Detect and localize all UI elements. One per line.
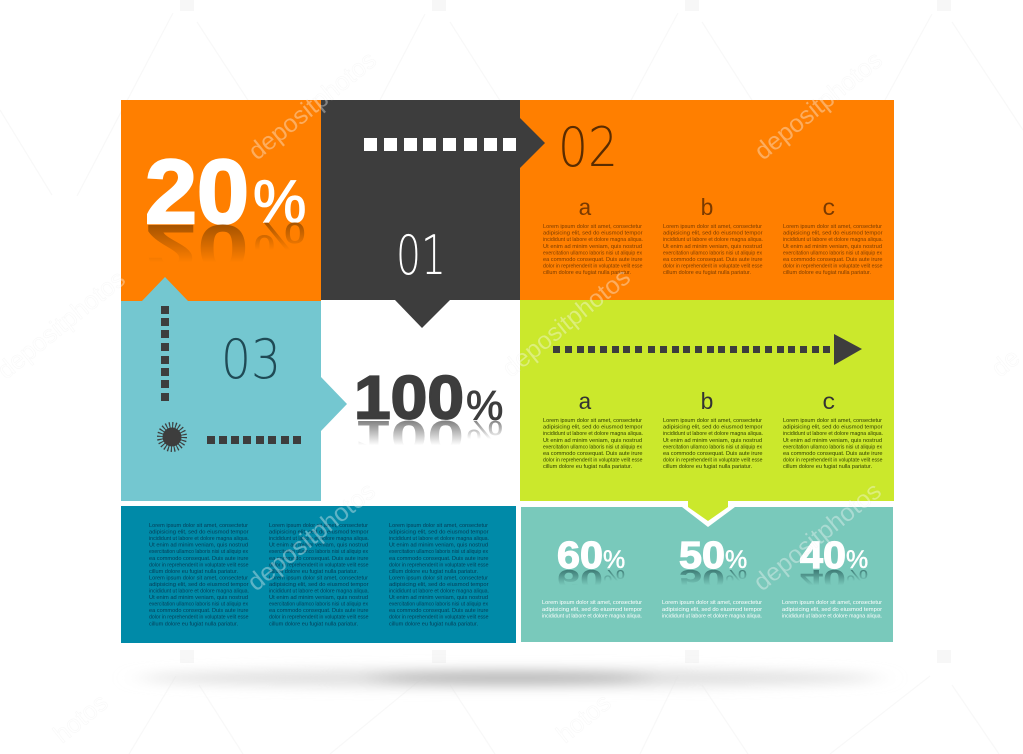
stat: 50%: 50 bbox=[679, 564, 725, 594]
body text columns: dolor in reprehenderit in voluptate velit esse bbox=[663, 264, 762, 270]
stat: 40%: % bbox=[846, 566, 868, 588]
body text columns: ea commodo consequat. Duis aute irure bbox=[663, 257, 762, 263]
body text columns: Lorem ipsum dolor sit amet, consectetur bbox=[543, 418, 642, 424]
body text columns bbox=[543, 224, 883, 276]
body text columns: Ut enim ad minim veniam, quis nostrud bbox=[783, 438, 882, 444]
column letters: b bbox=[700, 390, 714, 416]
column letters: c bbox=[822, 390, 836, 416]
body text columns: adipisicing elit, sed do eiusmod tempor bbox=[663, 231, 763, 237]
body text columns: adipisicing elit, sed do eiusmod tempor bbox=[543, 231, 643, 237]
panel: orange 20% bbox=[121, 100, 321, 301]
body text columns: dolor in reprehenderit in voluptate velit esse bbox=[269, 562, 368, 568]
ground shadow bbox=[140, 669, 880, 687]
body text columns: exercitation ullamco laboris nisi ut aliquip ex bbox=[149, 549, 248, 555]
body text columns: cillum dolore eu fugiat nulla pariatur. bbox=[663, 464, 752, 470]
column letters: a bbox=[578, 390, 592, 416]
stat: 50%: % bbox=[725, 566, 747, 588]
stat: 40%: % bbox=[846, 546, 868, 574]
body text columns: incididunt ut labore et dolore magna aliqua. bbox=[783, 431, 883, 437]
body text columns: ea commodo consequat. Duis aute irure bbox=[543, 257, 642, 263]
body text columns: ea commodo consequat. Duis aute irure bbox=[783, 451, 882, 457]
watermarks: depositphotos bbox=[749, 46, 888, 166]
watermarks: depositphotos bbox=[497, 263, 636, 383]
body text columns: exercitation ullamco laboris nisi ut aliquip ex bbox=[543, 444, 642, 450]
body text columns: ea commodo consequat. Duis aute irure bbox=[663, 451, 762, 457]
captions: adipisicing elit, sed do eiusmod tempor bbox=[782, 607, 882, 613]
captions: incididunt ut labore et dolore magna aliqua. bbox=[662, 614, 762, 620]
captions: incididunt ut labore et dolore magna aliqua. bbox=[542, 614, 642, 620]
vertical dotted line bbox=[161, 306, 169, 401]
body text columns: incididunt ut labore et dolore magna aliqua. bbox=[389, 536, 489, 542]
body text columns: adipisicing elit, sed do eiusmod tempor bbox=[543, 425, 643, 431]
body text columns: ea commodo consequat. Duis aute irure bbox=[389, 608, 488, 614]
body text columns: Lorem ipsum dolor sit amet, consectetur bbox=[663, 224, 762, 230]
body text columns: Lorem ipsum dolor sit amet, consectetur bbox=[389, 575, 488, 581]
captions: Lorem ipsum dolor sit amet, consectetur bbox=[782, 600, 882, 606]
watermarks: hotos bbox=[48, 688, 113, 749]
captions: Lorem ipsum dolor sit amet, consectetur bbox=[662, 600, 762, 606]
horizontal dotted line bbox=[207, 436, 301, 444]
body text columns: Ut enim ad minim veniam, quis nostrud bbox=[149, 595, 248, 601]
body text columns: exercitation ullamco laboris nisi ut aliquip ex bbox=[783, 444, 882, 450]
body text columns bbox=[543, 418, 883, 470]
body text columns: Ut enim ad minim veniam, quis nostrud bbox=[543, 438, 642, 444]
body text columns: Lorem ipsum dolor sit amet, consectetur bbox=[269, 575, 368, 581]
icon: sunburst bbox=[160, 426, 184, 448]
column letters: c bbox=[822, 196, 836, 222]
body text columns: Ut enim ad minim veniam, quis nostrud bbox=[389, 543, 488, 549]
body text columns: cillum dolore eu fugiat nulla pariatur. bbox=[269, 569, 358, 575]
body text columns: Ut enim ad minim veniam, quis nostrud bbox=[663, 438, 762, 444]
body text columns: adipisicing elit, sed do eiusmod tempor bbox=[783, 231, 883, 237]
column letters bbox=[578, 390, 836, 416]
body text columns: Lorem ipsum dolor sit amet, consectetur bbox=[783, 224, 882, 230]
column letters bbox=[578, 196, 836, 222]
body text columns: dolor in reprehenderit in voluptate velit esse bbox=[543, 264, 642, 270]
white dotted line bbox=[364, 138, 516, 151]
body text columns: incididunt ut labore et dolore magna aliqua. bbox=[389, 588, 489, 594]
body text columns: ea commodo consequat. Duis aute irure bbox=[543, 451, 642, 457]
stat: 20%: % bbox=[253, 168, 306, 235]
number 03: 03 bbox=[221, 328, 281, 391]
body text columns: Lorem ipsum dolor sit amet, consectetur bbox=[543, 224, 642, 230]
body text columns: exercitation ullamco laboris nisi ut aliquip ex bbox=[389, 549, 488, 555]
body text columns: adipisicing elit, sed do eiusmod tempor bbox=[389, 530, 489, 536]
stat: 100%: 100 bbox=[354, 411, 464, 460]
body text columns: Ut enim ad minim veniam, quis nostrud bbox=[269, 595, 368, 601]
body text columns: incididunt ut labore et dolore magna aliqua. bbox=[783, 237, 883, 243]
body text columns: cillum dolore eu fugiat nulla pariatur. bbox=[543, 270, 631, 276]
body text columns: dolor in reprehenderit in voluptate velit esse bbox=[269, 615, 368, 621]
body text columns: incididunt ut labore et dolore magna aliqua. bbox=[543, 237, 643, 243]
body text columns: exercitation ullamco laboris nisi ut aliquip ex bbox=[663, 444, 762, 450]
arrow: lime pointing down with white outline bbox=[682, 501, 735, 527]
body text columns: dolor in reprehenderit in voluptate velit esse bbox=[149, 562, 248, 568]
panel: teal stats bbox=[521, 501, 893, 642]
stat: 100%: 100 bbox=[354, 364, 464, 432]
stat: 100% bbox=[354, 364, 503, 460]
watermarks: depositphotos bbox=[748, 477, 887, 597]
body text columns: incididunt ut labore et dolore magna aliqua. bbox=[663, 431, 763, 437]
body text columns: dolor in reprehenderit in voluptate velit esse bbox=[149, 615, 248, 621]
body text columns: cillum dolore eu fugiat nulla pariatur. bbox=[783, 464, 872, 470]
stat: 20% bbox=[145, 142, 306, 284]
body text columns: exercitation ullamco laboris nisi ut aliquip ex bbox=[149, 602, 248, 608]
body text columns: Ut enim ad minim veniam, quis nostrud bbox=[663, 244, 762, 250]
body text columns: ea commodo consequat. Duis aute irure bbox=[389, 556, 488, 562]
captions bbox=[542, 600, 882, 620]
body text columns: adipisicing elit, sed do eiusmod tempor bbox=[269, 530, 369, 536]
body text columns: ea commodo consequat. Duis aute irure bbox=[783, 257, 882, 263]
stat: 50%: % bbox=[725, 546, 747, 574]
body text columns: ea commodo consequat. Duis aute irure bbox=[269, 608, 368, 614]
body text columns: Lorem ipsum dolor sit amet, consectetur bbox=[149, 575, 248, 581]
column letters: a bbox=[578, 196, 592, 222]
watermarks: hotos bbox=[551, 688, 616, 749]
panel: dark blue text bbox=[121, 506, 516, 643]
stat: 40% bbox=[800, 535, 868, 594]
stat: 20%: 20 bbox=[145, 142, 249, 243]
body text columns: exercitation ullamco laboris nisi ut aliquip ex bbox=[269, 602, 368, 608]
body text columns: Ut enim ad minim veniam, quis nostrud bbox=[543, 244, 642, 250]
body text columns: Ut enim ad minim veniam, quis nostrud bbox=[783, 244, 882, 250]
body text columns: dolor in reprehenderit in voluptate velit esse bbox=[543, 458, 642, 464]
stat: 100%: % bbox=[466, 382, 503, 429]
body text columns: exercitation ullamco laboris nisi ut aliquip ex bbox=[663, 250, 762, 256]
body text columns: incididunt ut labore et dolore magna aliqua. bbox=[663, 237, 763, 243]
body text columns: cillum dolore eu fugiat nulla pariatur. bbox=[783, 270, 871, 276]
stat: 50% bbox=[679, 535, 747, 594]
panel: light blue 03 bbox=[121, 277, 347, 501]
captions: Lorem ipsum dolor sit amet, consectetur bbox=[542, 600, 642, 606]
stat: 100%: % bbox=[466, 413, 503, 450]
body text columns: cillum dolore eu fugiat nulla pariatur. bbox=[269, 621, 358, 627]
body text columns: dolor in reprehenderit in voluptate velit esse bbox=[663, 458, 762, 464]
body text columns: adipisicing elit, sed do eiusmod tempor bbox=[663, 425, 763, 431]
captions: incididunt ut labore et dolore magna aliqua. bbox=[782, 614, 882, 620]
body text columns: cillum dolore eu fugiat nulla pariatur. bbox=[389, 621, 478, 627]
stat: 60%: 60 bbox=[557, 564, 603, 594]
body text columns: cillum dolore eu fugiat nulla pariatur. bbox=[149, 569, 238, 575]
watermarks: depositphotos bbox=[242, 477, 381, 597]
captions: adipisicing elit, sed do eiusmod tempor bbox=[662, 607, 762, 613]
number 02: 02 bbox=[558, 116, 618, 179]
captions: adipisicing elit, sed do eiusmod tempor bbox=[542, 607, 642, 613]
body text columns: adipisicing elit, sed do eiusmod tempor bbox=[783, 425, 883, 431]
stat: 40%: 40 bbox=[800, 564, 846, 594]
stat: 60%: % bbox=[603, 546, 625, 574]
number 01: 01 bbox=[396, 224, 446, 287]
body text columns: Lorem ipsum dolor sit amet, consectetur bbox=[783, 418, 882, 424]
stat: 20%: % bbox=[253, 212, 306, 266]
body text columns: exercitation ullamco laboris nisi ut aliquip ex bbox=[389, 602, 488, 608]
body text columns: dolor in reprehenderit in voluptate velit esse bbox=[783, 264, 882, 270]
body text columns: dolor in reprehenderit in voluptate velit esse bbox=[389, 562, 488, 568]
body text columns: adipisicing elit, sed do eiusmod tempor bbox=[149, 530, 249, 536]
body text columns: Lorem ipsum dolor sit amet, consectetur bbox=[663, 418, 762, 424]
body text columns: exercitation ullamco laboris nisi ut aliquip ex bbox=[543, 250, 642, 256]
body text columns: dolor in reprehenderit in voluptate velit esse bbox=[389, 615, 488, 621]
body text columns: adipisicing elit, sed do eiusmod tempor bbox=[269, 582, 369, 588]
body text columns: ea commodo consequat. Duis aute irure bbox=[269, 556, 368, 562]
body text columns: cillum dolore eu fugiat nulla pariatur. bbox=[663, 270, 751, 276]
body text columns: exercitation ullamco laboris nisi ut aliquip ex bbox=[269, 549, 368, 555]
stat: 20%: 20 bbox=[145, 211, 249, 284]
body text columns: ea commodo consequat. Duis aute irure bbox=[149, 556, 248, 562]
body text columns: exercitation ullamco laboris nisi ut aliquip ex bbox=[783, 250, 882, 256]
body text columns: incididunt ut labore et dolore magna aliqua. bbox=[269, 536, 369, 542]
stat: 60%: 60 bbox=[557, 535, 603, 577]
body text columns: Ut enim ad minim veniam, quis nostrud bbox=[389, 595, 488, 601]
arrow: dark pointing right bbox=[520, 118, 545, 168]
body text columns: Lorem ipsum dolor sit amet, consectetur bbox=[269, 523, 368, 529]
body text columns bbox=[149, 523, 489, 627]
body text columns: ea commodo consequat. Duis aute irure bbox=[149, 608, 248, 614]
watermarks: depositphotos bbox=[243, 46, 382, 166]
body text columns: cillum dolore eu fugiat nulla pariatur. bbox=[149, 621, 238, 627]
stat: 60% bbox=[557, 535, 625, 594]
body text columns: Lorem ipsum dolor sit amet, consectetur bbox=[149, 523, 248, 529]
body text columns: adipisicing elit, sed do eiusmod tempor bbox=[149, 582, 249, 588]
body text columns: incididunt ut labore et dolore magna aliqua. bbox=[543, 431, 643, 437]
panel: orange 02 bbox=[520, 100, 894, 300]
stat: 50%: 50 bbox=[679, 535, 725, 577]
body text columns: incididunt ut labore et dolore magna aliqua. bbox=[149, 536, 249, 542]
arrow: dark pointing down bbox=[395, 300, 450, 328]
column letters: b bbox=[700, 196, 714, 222]
panel: dark 01 bbox=[321, 100, 520, 300]
body text columns: Ut enim ad minim veniam, quis nostrud bbox=[149, 543, 248, 549]
stat: 40%: 40 bbox=[800, 535, 846, 577]
body text columns: adipisicing elit, sed do eiusmod tempor bbox=[389, 582, 489, 588]
dotted arrow bbox=[553, 334, 862, 365]
body text columns: cillum dolore eu fugiat nulla pariatur. bbox=[389, 569, 478, 575]
body text columns: Lorem ipsum dolor sit amet, consectetur bbox=[389, 523, 488, 529]
body text columns: Ut enim ad minim veniam, quis nostrud bbox=[269, 543, 368, 549]
panel: lime bbox=[520, 300, 894, 501]
body text columns: cillum dolore eu fugiat nulla pariatur. bbox=[543, 464, 632, 470]
stat: 60%: % bbox=[603, 566, 625, 588]
body text columns: incididunt ut labore et dolore magna aliqua. bbox=[269, 588, 369, 594]
body text columns: incididunt ut labore et dolore magna aliqua. bbox=[149, 588, 249, 594]
body text columns: dolor in reprehenderit in voluptate velit esse bbox=[783, 458, 882, 464]
